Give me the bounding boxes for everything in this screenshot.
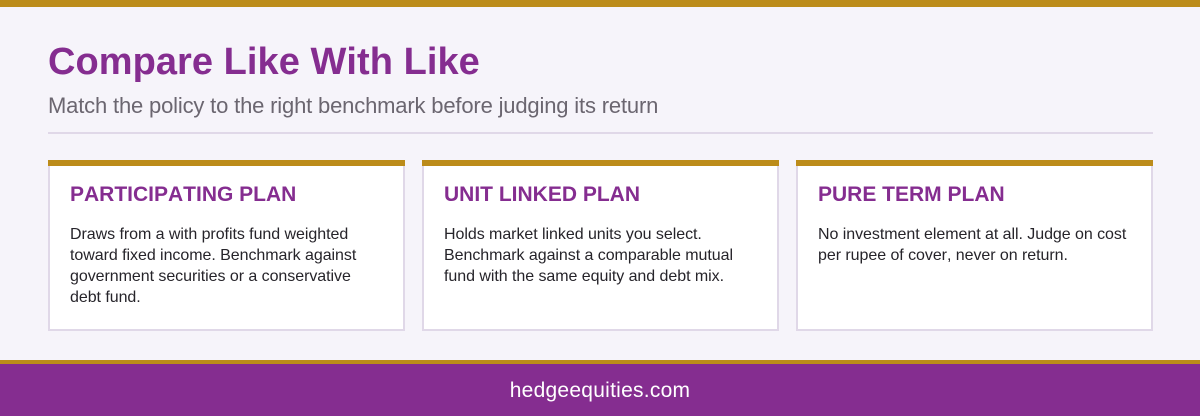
subtitle: Match the policy to the right benchmark before judging its return	[48, 93, 658, 118]
text: unit linked plan: fund with the same equity and debt mix.	[444, 268, 724, 285]
text: participating plan: toward fixed income. Benchmark against	[70, 247, 356, 264]
text: unit linked plan: Benchmark against a comparable mutual	[444, 247, 733, 264]
heading: participating plan: PARTICIPATING PLAN	[70, 183, 296, 206]
title: Compare Like With Like	[48, 41, 480, 83]
footer band	[0, 360, 1200, 416]
text: unit linked plan: Holds market linked units you select.	[444, 226, 702, 243]
footer text: hedgeequities.com	[510, 379, 690, 402]
text: pure term plan: No investment element at all. Judge on cost	[818, 226, 1126, 243]
text: participating plan: debt fund.	[70, 289, 141, 306]
text: pure term plan	[818, 226, 1126, 264]
text: participating plan	[70, 226, 356, 306]
panel: pure term plan	[796, 160, 1153, 331]
panel: unit linked plan	[422, 160, 779, 331]
top accent bar	[0, 0, 1200, 7]
heading: pure term plan: PURE TERM PLAN	[818, 183, 1005, 206]
panel: participating plan	[48, 160, 405, 331]
text: participating plan: Draws from a with profits fund weighted	[70, 226, 348, 243]
text: pure term plan: per rupee of cover, never on return.	[818, 247, 1068, 264]
text: unit linked plan	[444, 226, 733, 285]
text: participating plan: government securities or a conservative	[70, 268, 351, 285]
heading: unit linked plan: UNIT LINKED PLAN	[444, 183, 640, 206]
